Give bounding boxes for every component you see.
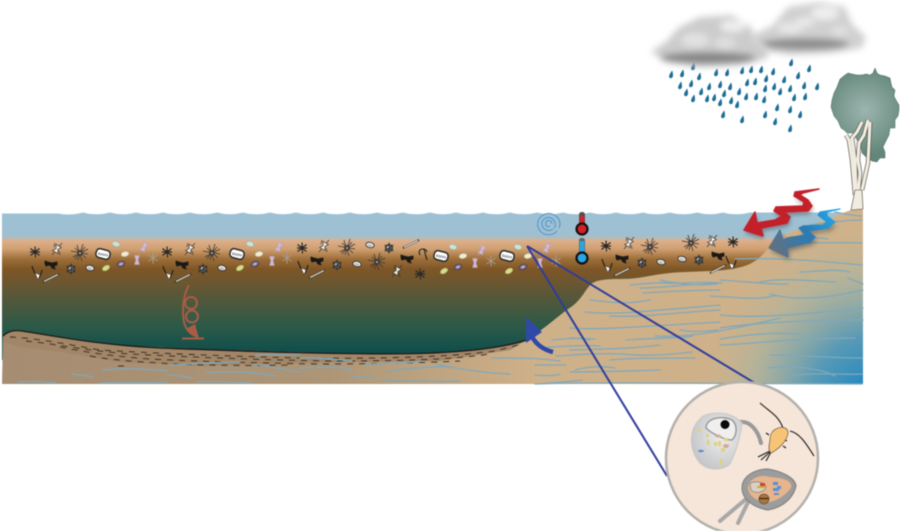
magnified zooplankton circle: [666, 382, 818, 531]
shore and soil: [2, 200, 863, 384]
tree: [831, 68, 899, 210]
arrow: sinking spiral: [182, 285, 204, 338]
tree trunk: [846, 120, 870, 210]
rotifer: [720, 469, 796, 523]
cloud left: [651, 15, 769, 67]
groundwater streaks: [18, 212, 863, 384]
icon: cold thermometer: [576, 238, 588, 264]
lakebed sediment layer: [3, 331, 527, 366]
plankton and algae band: [30, 234, 738, 282]
lake water column: [2, 212, 840, 360]
arrow: groundwater inflow upward: [526, 317, 553, 352]
zoom-in lines: [527, 246, 763, 476]
arrow: warm surface inflow: [744, 189, 819, 239]
icon: warm thermometer: [576, 212, 588, 234]
arrow: cool subsurface inflow: [769, 209, 840, 260]
rain drops: [669, 58, 819, 132]
copepod: [758, 403, 814, 461]
cloud right: [750, 2, 866, 55]
tree canopy: [831, 68, 899, 162]
icon: mixing swirl: [538, 214, 560, 235]
daphnia: [691, 413, 761, 469]
